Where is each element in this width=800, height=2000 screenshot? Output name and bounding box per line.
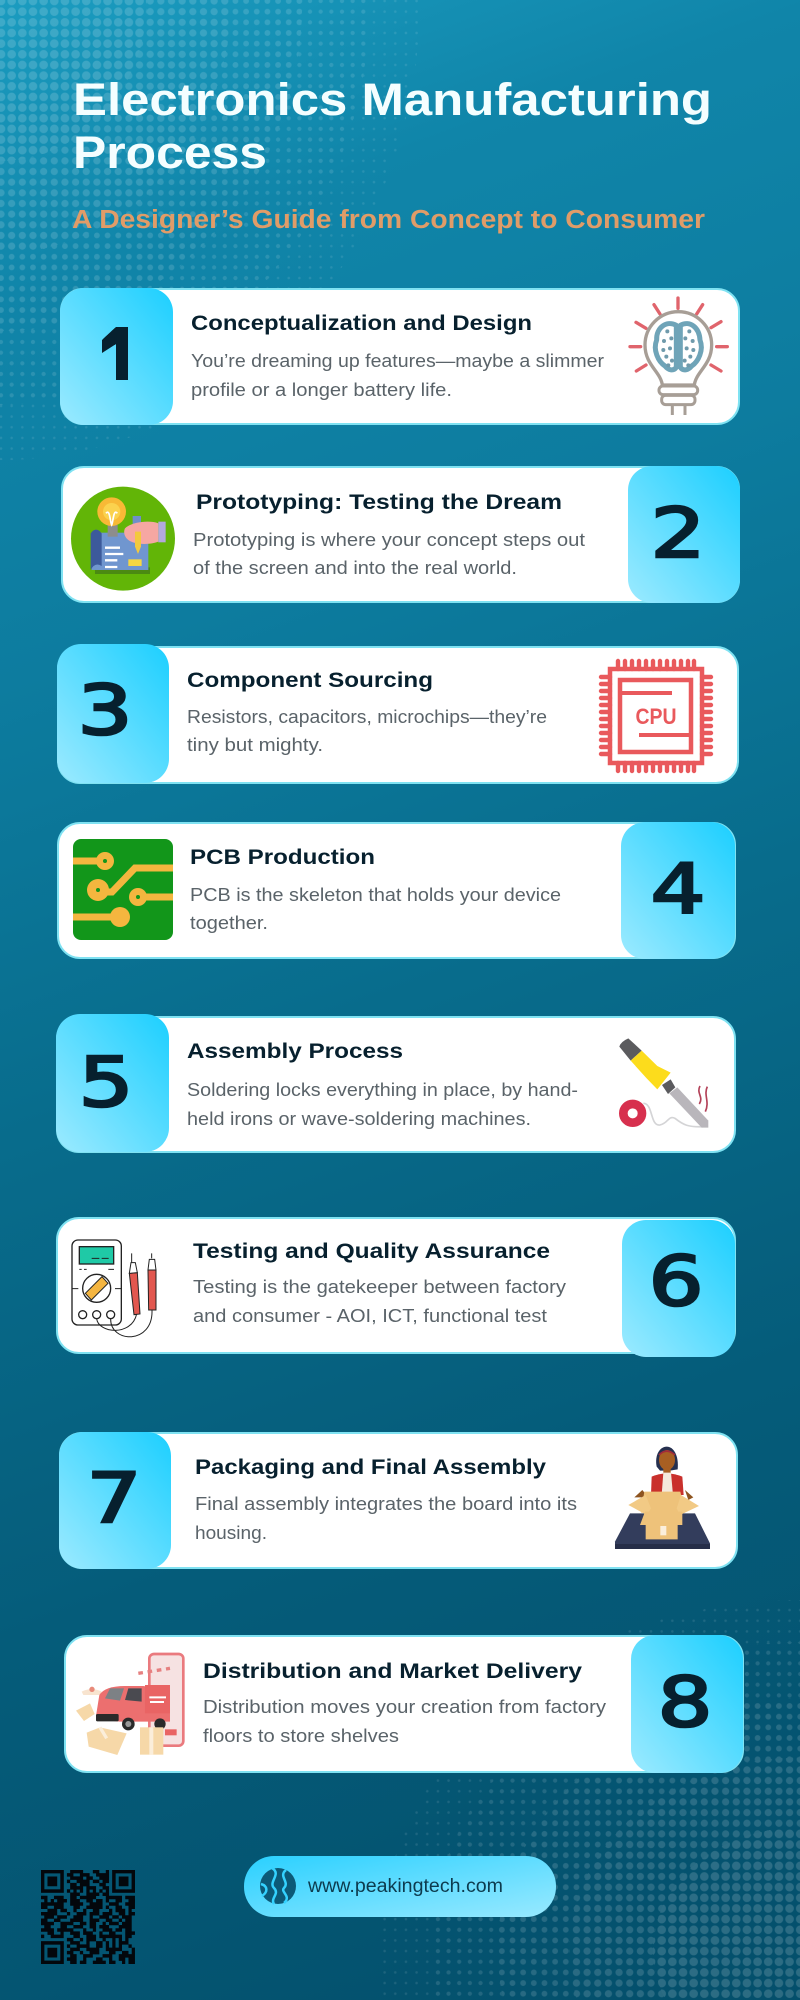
description: of the screen and into the real world. bbox=[193, 557, 517, 578]
description: together. bbox=[190, 912, 268, 933]
description: Resistors, capacitors, microchips—they’re bbox=[187, 706, 547, 727]
heading: Component Sourcing bbox=[187, 669, 433, 692]
panel: step 1 bbox=[60, 288, 739, 425]
description: profile or a longer battery life. bbox=[191, 379, 452, 400]
description bbox=[187, 706, 547, 755]
panel: step 7: 7 bbox=[87, 1459, 141, 1539]
description bbox=[190, 884, 561, 933]
heading: Prototyping: Testing the Dream bbox=[196, 491, 562, 514]
heading: Assembly Process bbox=[187, 1040, 403, 1063]
panel: step 4: 4 bbox=[651, 850, 705, 930]
QR code bbox=[41, 1872, 138, 1962]
website pill bbox=[244, 1856, 556, 1917]
heading: Packaging and Final Assembly bbox=[195, 1456, 546, 1479]
description bbox=[203, 1696, 607, 1746]
description: held irons or wave-soldering machines. bbox=[187, 1108, 531, 1129]
description: tiny but mighty. bbox=[187, 734, 323, 755]
icon: packing person bbox=[615, 1447, 710, 1549]
description: You’re dreaming up features—maybe a slimmer bbox=[191, 350, 604, 371]
website address: www.peakingtech.com bbox=[307, 1876, 503, 1897]
panel: step 2 bbox=[62, 466, 740, 603]
title: Electronics Manufacturing bbox=[73, 74, 712, 125]
description: Testing is the gatekeeper between factory bbox=[193, 1276, 567, 1297]
description: PCB is the skeleton that holds your device bbox=[190, 884, 561, 905]
panel: step 8 bbox=[65, 1635, 743, 1773]
icon: delivery truck and phone bbox=[76, 1654, 183, 1755]
icon: soldering iron bbox=[619, 1038, 708, 1128]
panel: step 7 bbox=[59, 1432, 737, 1569]
panel: step 2: 2 bbox=[651, 494, 705, 574]
description bbox=[193, 529, 585, 578]
icon: multimeter bbox=[72, 1240, 156, 1337]
panel: step 8: 8 bbox=[658, 1663, 712, 1743]
heading: PCB Production bbox=[190, 846, 375, 869]
description: Soldering locks everything in place, by hand- bbox=[187, 1079, 578, 1100]
panel: step 6 bbox=[57, 1218, 735, 1357]
panel: step 3 bbox=[57, 644, 738, 783]
description: Distribution moves your creation from factory bbox=[203, 1696, 607, 1717]
description: Final assembly integrates the board into its bbox=[195, 1493, 577, 1514]
panel: step 3: 3 bbox=[78, 671, 132, 751]
heading: Testing and Quality Assurance bbox=[193, 1240, 550, 1263]
description: and consumer - AOI, ICT, functional test bbox=[193, 1305, 547, 1326]
title bbox=[73, 74, 712, 178]
title: Process bbox=[73, 127, 267, 178]
panel: step 5: 5 bbox=[79, 1043, 133, 1123]
panel: step 6: 6 bbox=[649, 1242, 703, 1322]
description bbox=[191, 350, 604, 400]
subtitle: A Designer’s Guide from Concept to Consumer bbox=[72, 206, 705, 234]
description: floors to store shelves bbox=[203, 1725, 399, 1746]
heading: Distribution and Market Delivery bbox=[203, 1660, 582, 1683]
description: housing. bbox=[195, 1522, 267, 1543]
icon: prototype blueprint bbox=[71, 487, 175, 591]
panel: step 1: 1 bbox=[96, 316, 140, 396]
description: Prototyping is where your concept steps out bbox=[193, 529, 585, 550]
description bbox=[187, 1079, 578, 1129]
icon: light bulb with brain bbox=[630, 298, 727, 415]
icon: PCB board bbox=[73, 839, 173, 940]
icon: globe bbox=[260, 1868, 296, 1904]
icon: CPU chip bbox=[601, 661, 711, 771]
panel: step 4 bbox=[58, 822, 735, 959]
description bbox=[195, 1493, 577, 1543]
panel: step 5 bbox=[56, 1014, 735, 1152]
heading: Conceptualization and Design bbox=[191, 312, 532, 335]
description bbox=[193, 1276, 567, 1326]
icon: CPU chip: CPU bbox=[636, 704, 676, 729]
